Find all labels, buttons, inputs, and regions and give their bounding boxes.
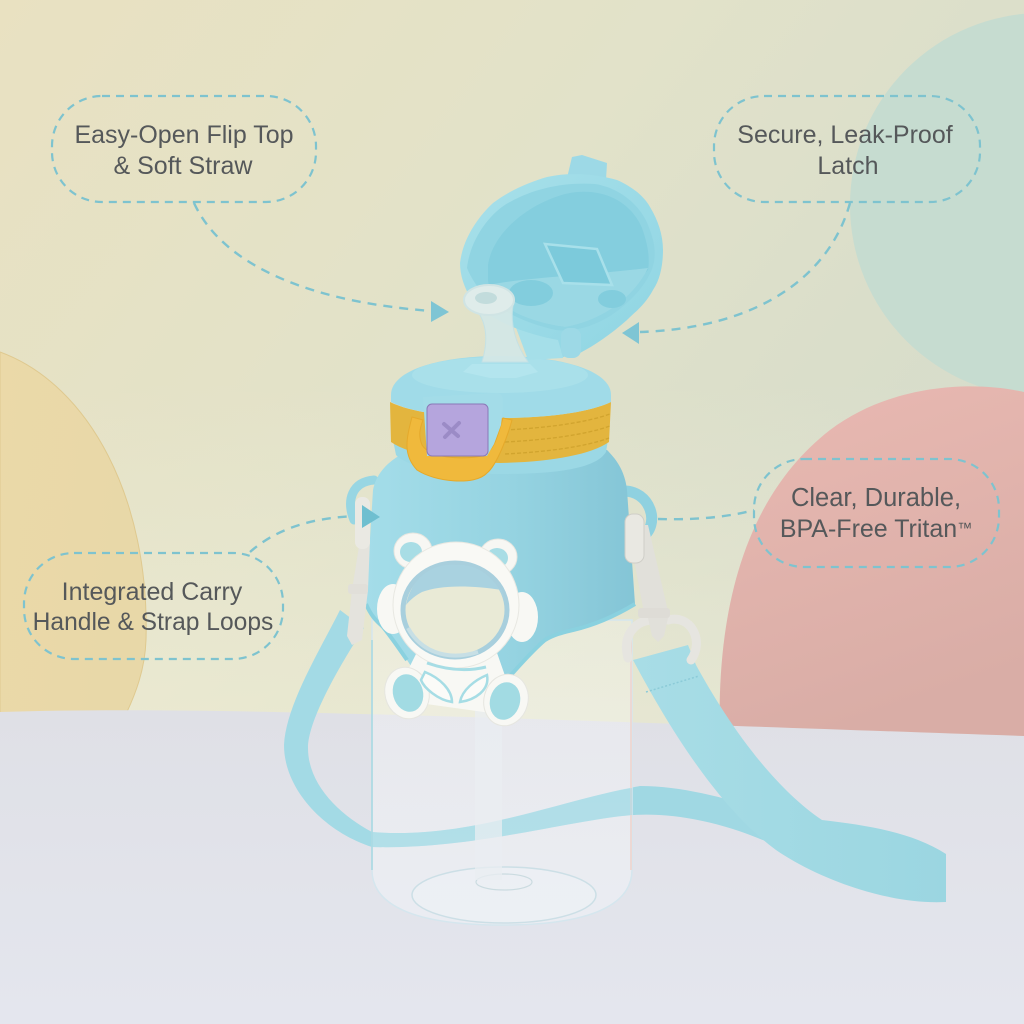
callout: latch: Latch	[817, 152, 879, 180]
soft straw	[464, 285, 528, 362]
callout: flip top: Easy-Open Flip Top	[74, 121, 294, 149]
callout: flip top: & Soft Straw	[114, 152, 253, 180]
arrow: carry handle	[250, 516, 360, 552]
handle loop right	[623, 491, 652, 538]
callout: tritan: Clear, Durable,	[791, 484, 961, 512]
callout: carry handle: Integrated Carry	[62, 578, 243, 606]
carabiner right	[625, 514, 696, 660]
bottle clear body	[372, 620, 632, 925]
arrow: tritan	[658, 510, 754, 519]
flip lid	[460, 155, 663, 360]
background arch: tan	[0, 352, 146, 714]
strap: front right	[633, 645, 946, 902]
callout: tritan: BPA-Free Tritan	[780, 515, 957, 543]
callout: carry handle	[24, 553, 283, 659]
table surface	[0, 710, 1024, 1024]
arrow head: carry handle	[362, 505, 380, 528]
yellow handle	[407, 417, 512, 481]
latch button	[423, 393, 503, 456]
arrow: latch	[622, 203, 850, 344]
carabiner left	[347, 497, 370, 645]
callout: tritan	[754, 459, 999, 567]
background circle: pink	[720, 386, 1024, 740]
piece behind straw	[515, 325, 565, 360]
inner straw	[475, 705, 502, 880]
callout: carry handle: Handle & Strap Loops	[33, 609, 273, 636]
handle loop left	[351, 480, 374, 520]
background circle: teal	[850, 13, 1024, 397]
background wall	[0, 0, 1024, 740]
callout: latch: Secure, Leak-Proof	[737, 121, 953, 149]
lid hinge tab	[567, 155, 607, 180]
strap: back left and bottom	[284, 610, 815, 858]
water bottle	[347, 155, 850, 925]
arrow: flip top to straw	[194, 203, 449, 322]
callout: latch	[714, 96, 980, 202]
bottle upper sleeve	[366, 443, 635, 680]
lid collar	[390, 356, 611, 474]
callout: flip top	[52, 96, 316, 202]
callout: tritan: ™	[957, 520, 972, 537]
bear window	[377, 533, 538, 731]
